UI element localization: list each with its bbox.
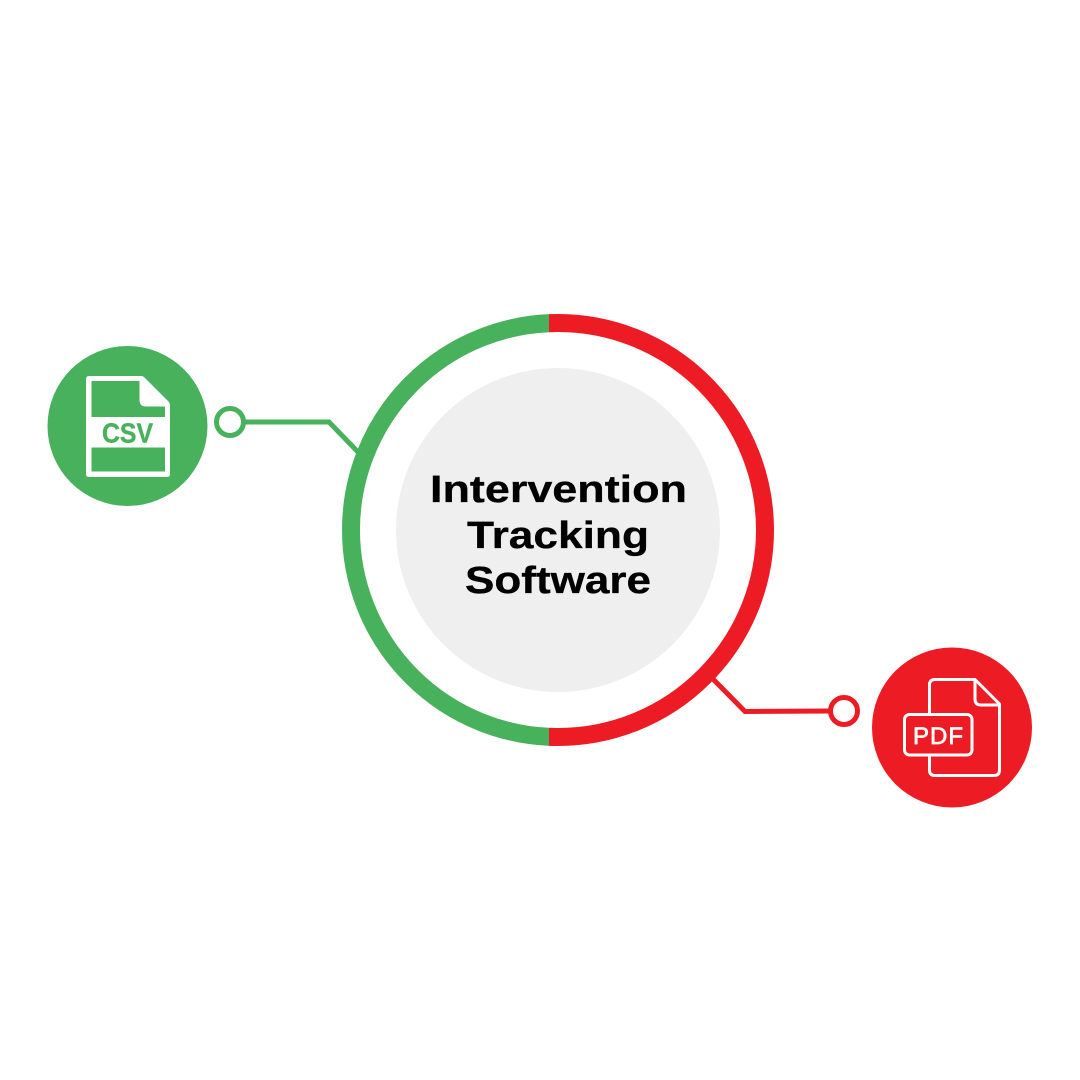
- title: Software: [465, 560, 651, 602]
- icon: PDF file: [872, 648, 1032, 808]
- infographic: [48, 314, 1032, 808]
- connector: ring to PDF: [712, 678, 858, 724]
- icon: CSV file: CSV: [102, 418, 153, 448]
- title: [430, 469, 687, 602]
- icon: PDF file: PDF: [913, 723, 963, 750]
- title: Tracking: [467, 515, 649, 557]
- title: Intervention: [430, 469, 687, 511]
- central ring: [351, 323, 765, 737]
- icon: CSV file: [48, 346, 208, 506]
- center disc: [396, 368, 720, 692]
- connector: CSV to ring: [216, 408, 358, 452]
